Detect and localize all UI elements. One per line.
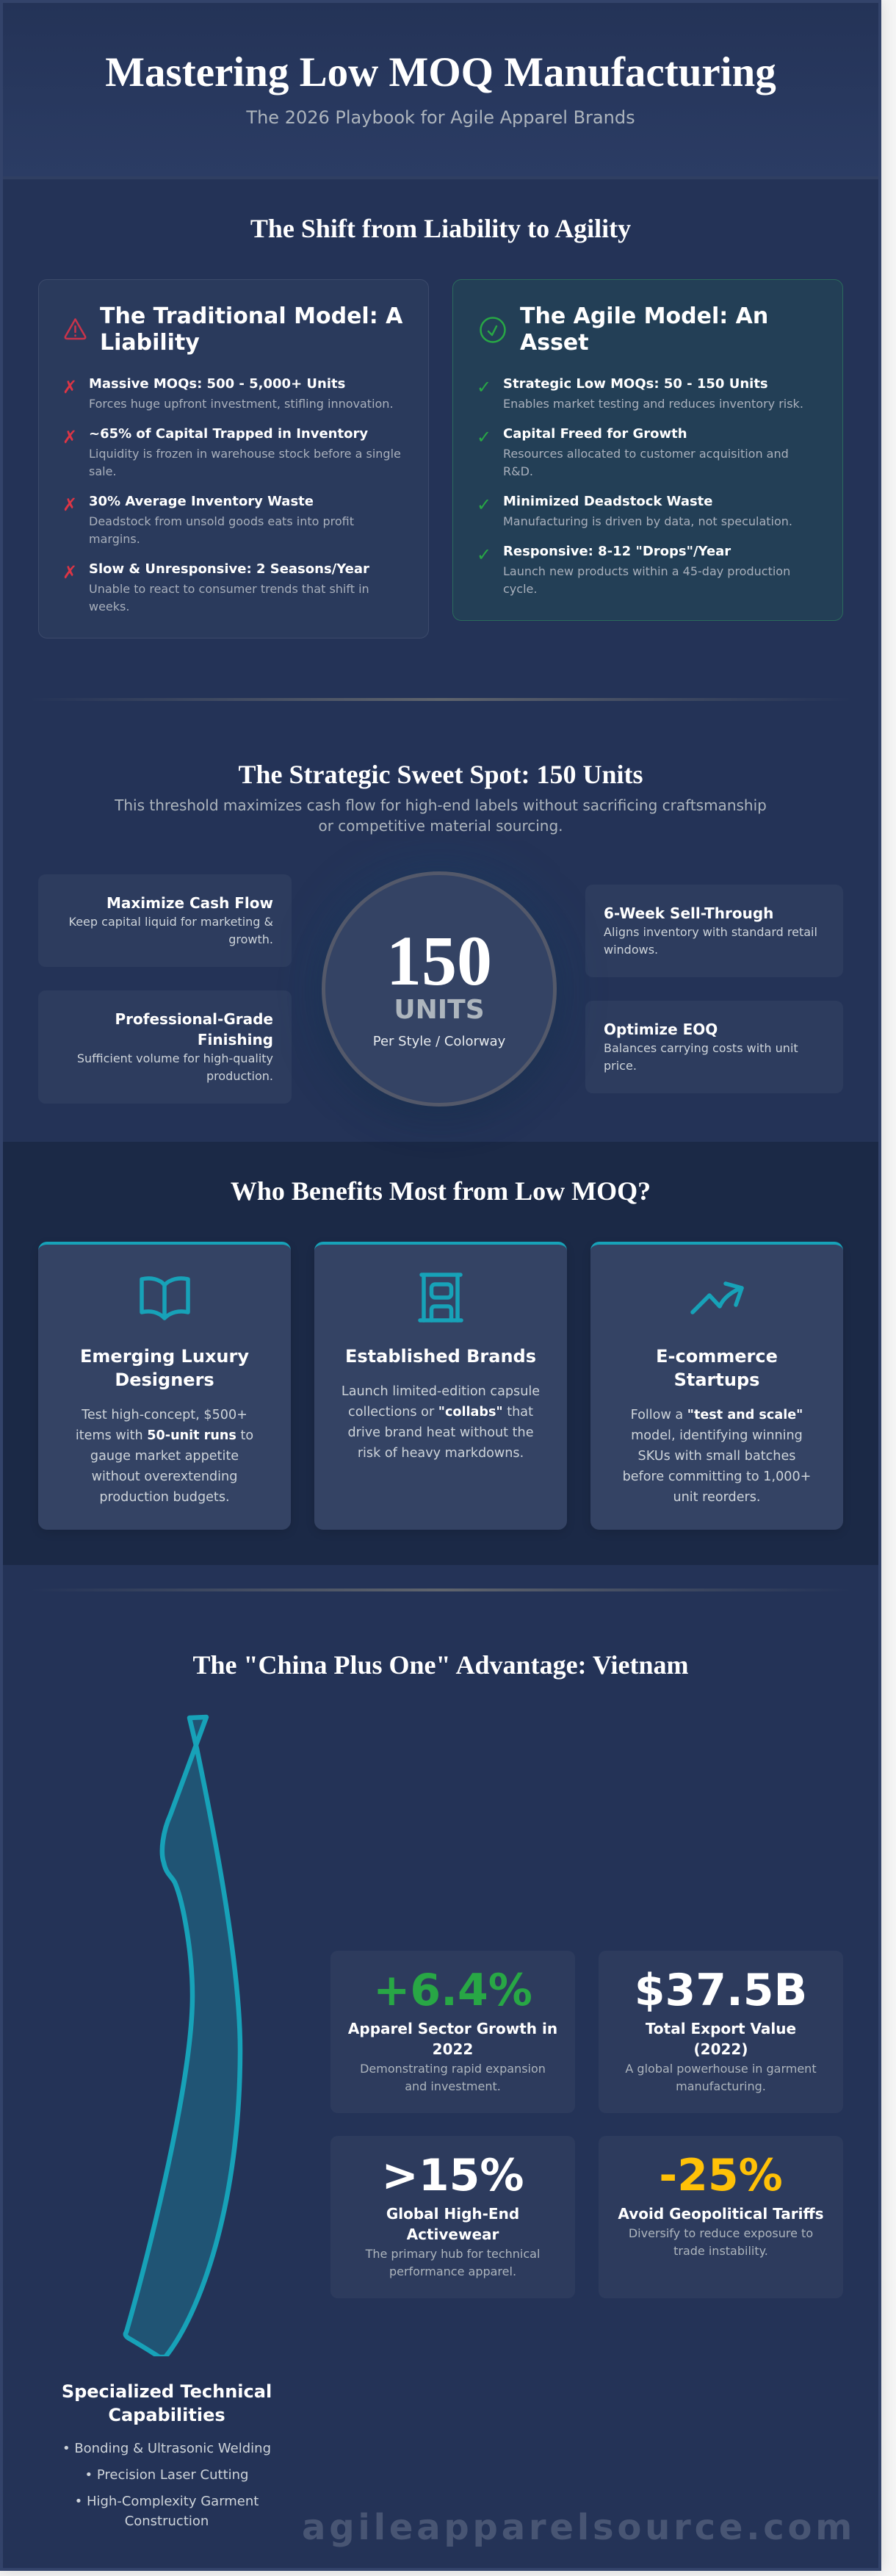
- capability: garment: Construction: [125, 2514, 209, 2529]
- item: capital trapped: [89, 426, 401, 478]
- stat: apparel growth: [330, 1951, 575, 2113]
- card: emerging luxury designers: [38, 1242, 291, 1530]
- number 150: 150: [386, 921, 492, 1000]
- card: optimize EOQ: Balances carrying costs with unit: [604, 1041, 798, 1055]
- value: -25%: [659, 2150, 783, 2201]
- item: inventory waste: 30% Average Inventory Waste: [89, 494, 314, 509]
- card: optimize EOQ: Optimize EOQ: [604, 1021, 718, 1038]
- note: [625, 2062, 817, 2093]
- icon: open book: [140, 1276, 190, 1320]
- item: responsive drops: [503, 544, 790, 596]
- label: Avoid Geopolitical Tariffs: [618, 2205, 824, 2223]
- description: Test high-concept, $500+: [82, 1408, 248, 1422]
- item: capital trapped: Liquidity is frozen in warehouse stock before a single: [89, 447, 401, 461]
- value: $37.5B: [635, 1965, 807, 2016]
- cross icon 1: ✗: [62, 377, 77, 397]
- icon: trending arrow: [690, 1281, 744, 1314]
- subtitle: The 2026 Playbook for Agile Apparel Brands: [246, 107, 635, 128]
- note: A global powerhouse in garment: [625, 2062, 817, 2076]
- description: production budgets.: [99, 1490, 230, 1505]
- label: 2022: [433, 2040, 473, 2058]
- note: [366, 2247, 540, 2278]
- cross icon 2: ✗: [62, 427, 77, 447]
- card: maximize cash flow: [38, 874, 292, 967]
- item: responsive drops: Responsive: 8-12 "Drops"/Year: [503, 544, 731, 559]
- card: professional finishing: Professional-Grade: [115, 1010, 273, 1028]
- map: Vietnam silhouette: [123, 1715, 242, 2356]
- label: [645, 2020, 796, 2058]
- item: massive MOQs: Massive MOQs: 500 - 5,000+ Units: [89, 376, 345, 392]
- card: maximize cash flow: growth.: [228, 932, 273, 946]
- item: minimized deadstock: [503, 494, 792, 528]
- description: unit reorders.: [673, 1490, 761, 1505]
- heading: agile model: Asset: [520, 330, 589, 356]
- capabilities block: [62, 2381, 272, 2529]
- panel: traditional model: [38, 279, 429, 638]
- cross icon 4: ✗: [62, 562, 77, 583]
- note: The primary hub for technical: [366, 2247, 540, 2261]
- sweet spot description: or competitive material sourcing.: [318, 817, 563, 835]
- check icon 1: ✓: [477, 377, 491, 397]
- sweet spot description: This threshold maximizes cash flow for high-end labels without sacrificing craftsmanship: [115, 796, 767, 814]
- description: gauge market appetite: [90, 1449, 239, 1464]
- item: slow seasons: Slow & Unresponsive: 2 Seasons/Year: [89, 561, 369, 577]
- icon: building: [418, 1273, 463, 1323]
- capability: laser: • Precision Laser Cutting: [85, 2467, 248, 2483]
- stat: export value: [599, 1951, 843, 2113]
- item: slow seasons: weeks.: [89, 600, 129, 614]
- card: sell-through: 6-Week Sell-Through: [604, 904, 773, 922]
- description: risk of heavy markdowns.: [358, 1446, 524, 1461]
- description: drive brand heat without the: [347, 1425, 534, 1440]
- label: (2022): [694, 2040, 748, 2058]
- card: sell-through: Aligns inventory with standard retail: [604, 925, 817, 939]
- description: Follow a "test and scale": [631, 1408, 803, 1422]
- card: established brands: [314, 1242, 567, 1530]
- description: [623, 1408, 811, 1505]
- item: minimized deadstock: Manufacturing is driven by data, not speculation.: [503, 514, 792, 528]
- capability: garment: [75, 2494, 259, 2529]
- description: [342, 1384, 540, 1461]
- capabilities list: [62, 2441, 271, 2529]
- item: slow seasons: [89, 561, 369, 614]
- main title: Mastering Low MOQ Manufacturing: [105, 49, 776, 96]
- value: >15%: [382, 2150, 524, 2201]
- item: inventory waste: [89, 494, 354, 546]
- item: capital freed: Resources allocated to customer acquisition and: [503, 447, 789, 461]
- item: capital freed: R&D.: [503, 464, 533, 478]
- check icon 3: ✓: [477, 494, 491, 515]
- heading: agile model: The Agile Model: An: [520, 303, 768, 329]
- capability: garment: • High-Complexity Garment: [75, 2494, 259, 2509]
- header band: [3, 3, 878, 179]
- description: model, identifying winning: [631, 1428, 803, 1443]
- units label: UNITS: [394, 995, 485, 1025]
- item: responsive drops: Launch new products within a 45-day production: [503, 564, 790, 578]
- list: traditional model points: [62, 376, 401, 614]
- capability: bonding: • Bonding & Ultrasonic Welding: [62, 2441, 271, 2456]
- sweet spot description: [115, 796, 767, 835]
- item: inventory waste: Deadstock from unsold goods eats into profit: [89, 514, 354, 528]
- watermark: agileapparelsource.com: [302, 2507, 856, 2548]
- note: Demonstrating rapid expansion: [360, 2062, 546, 2076]
- item: inventory waste: margins.: [89, 532, 140, 546]
- circle: 150 units: [322, 871, 557, 1107]
- description: [76, 1408, 253, 1505]
- description: SKUs with small batches: [638, 1449, 795, 1464]
- label: Apparel Sector Growth in: [348, 2020, 557, 2037]
- heading: [80, 1346, 249, 1390]
- description: before committing to 1,000+: [623, 1469, 811, 1484]
- note: [360, 2062, 546, 2093]
- panel: agile model: [452, 279, 843, 621]
- note: trade instability.: [673, 2244, 768, 2258]
- heading: E-commerce: [656, 1346, 778, 1367]
- card: optimize EOQ: [585, 1001, 843, 1093]
- card: professional finishing: [38, 990, 292, 1104]
- heading: capabilities: [62, 2381, 272, 2425]
- card: maximize cash flow: Maximize Cash Flow: [106, 894, 273, 912]
- note: manufacturing.: [676, 2079, 766, 2093]
- description: Launch limited-edition capsule: [342, 1384, 540, 1399]
- note: and investment.: [405, 2079, 501, 2093]
- heading: capabilities: Capabilities: [108, 2405, 225, 2425]
- heading: shift section: The Shift from Liability to Agility: [250, 214, 631, 243]
- description: without overextending: [92, 1469, 237, 1484]
- icon: check circle: [480, 317, 506, 343]
- card: optimize EOQ: price.: [604, 1059, 637, 1073]
- per style label: Per Style / Colorway: [373, 1034, 505, 1049]
- card: professional finishing: Finishing: [198, 1031, 273, 1048]
- heading: traditional model: The Traditional Model: A: [100, 303, 402, 329]
- heading: capabilities: Specialized Technical: [62, 2381, 272, 2402]
- item: responsive drops: cycle.: [503, 582, 537, 596]
- section band: who benefits: [3, 1142, 878, 1565]
- label: [348, 2020, 557, 2058]
- card: professional finishing: Sufficient volume for high-quality: [77, 1051, 273, 1065]
- card: sell-through: [585, 885, 843, 977]
- icon: warning triangle: [65, 318, 87, 339]
- item: capital freed: Capital Freed for Growth: [503, 426, 687, 442]
- card: e-commerce startups: [590, 1242, 843, 1530]
- item: slow seasons: Unable to react to consumer trends that shift in: [89, 582, 369, 596]
- check icon 4: ✓: [477, 544, 491, 565]
- heading: agile model: [520, 303, 768, 356]
- label: Global High-End: [386, 2205, 519, 2223]
- item: capital trapped: ~65% of Capital Trapped in Inventory: [89, 426, 368, 442]
- heading: Startups: [674, 1370, 759, 1390]
- stat: activewear: [330, 2136, 575, 2298]
- cross icon 3: ✗: [62, 494, 77, 515]
- heading: Emerging Luxury: [80, 1346, 249, 1367]
- heading: [656, 1346, 778, 1390]
- heading: who benefits: Who Benefits Most from Low MOQ?: [231, 1176, 651, 1206]
- heading: traditional model: Liability: [100, 330, 200, 356]
- item: capital trapped: sale.: [89, 464, 117, 478]
- item: strategic MOQs: Strategic Low MOQs: 50 - 150 Units: [503, 376, 768, 392]
- label: [386, 2205, 519, 2243]
- item: minimized deadstock: Minimized Deadstock Waste: [503, 494, 712, 509]
- description: items with 50-unit runs to: [76, 1428, 253, 1443]
- item: strategic MOQs: Enables market testing and reduces inventory risk.: [503, 397, 803, 411]
- card: sell-through: windows.: [604, 943, 658, 957]
- check icon 2: ✓: [477, 427, 491, 447]
- heading: Established Brands: [345, 1346, 536, 1367]
- note: [629, 2226, 813, 2258]
- card: maximize cash flow: Keep capital liquid for marketing &: [69, 915, 273, 929]
- list: agile model points: [477, 376, 803, 596]
- card: professional finishing: production.: [206, 1069, 273, 1083]
- label: Total Export Value: [646, 2020, 796, 2037]
- item: capital freed: [503, 426, 789, 478]
- label: Activewear: [407, 2226, 499, 2243]
- heading: traditional model: [100, 303, 402, 356]
- item: strategic MOQs: [503, 376, 803, 411]
- heading: Designers: [115, 1370, 214, 1390]
- heading: vietnam advantage: The "China Plus One" Advantage: Vietnam: [192, 1650, 689, 1680]
- note: performance apparel.: [389, 2264, 516, 2278]
- stat: tariffs: [599, 2136, 843, 2298]
- note: Diversify to reduce exposure to: [629, 2226, 813, 2240]
- description: collections or "collabs" that: [348, 1405, 533, 1420]
- item: massive MOQs: [89, 376, 394, 411]
- value: +6.4%: [373, 1965, 532, 2016]
- heading: sweet spot: The Strategic Sweet Spot: 150 Units: [239, 760, 643, 789]
- item: massive MOQs: Forces huge upfront investment, stifling innovation.: [89, 397, 394, 411]
